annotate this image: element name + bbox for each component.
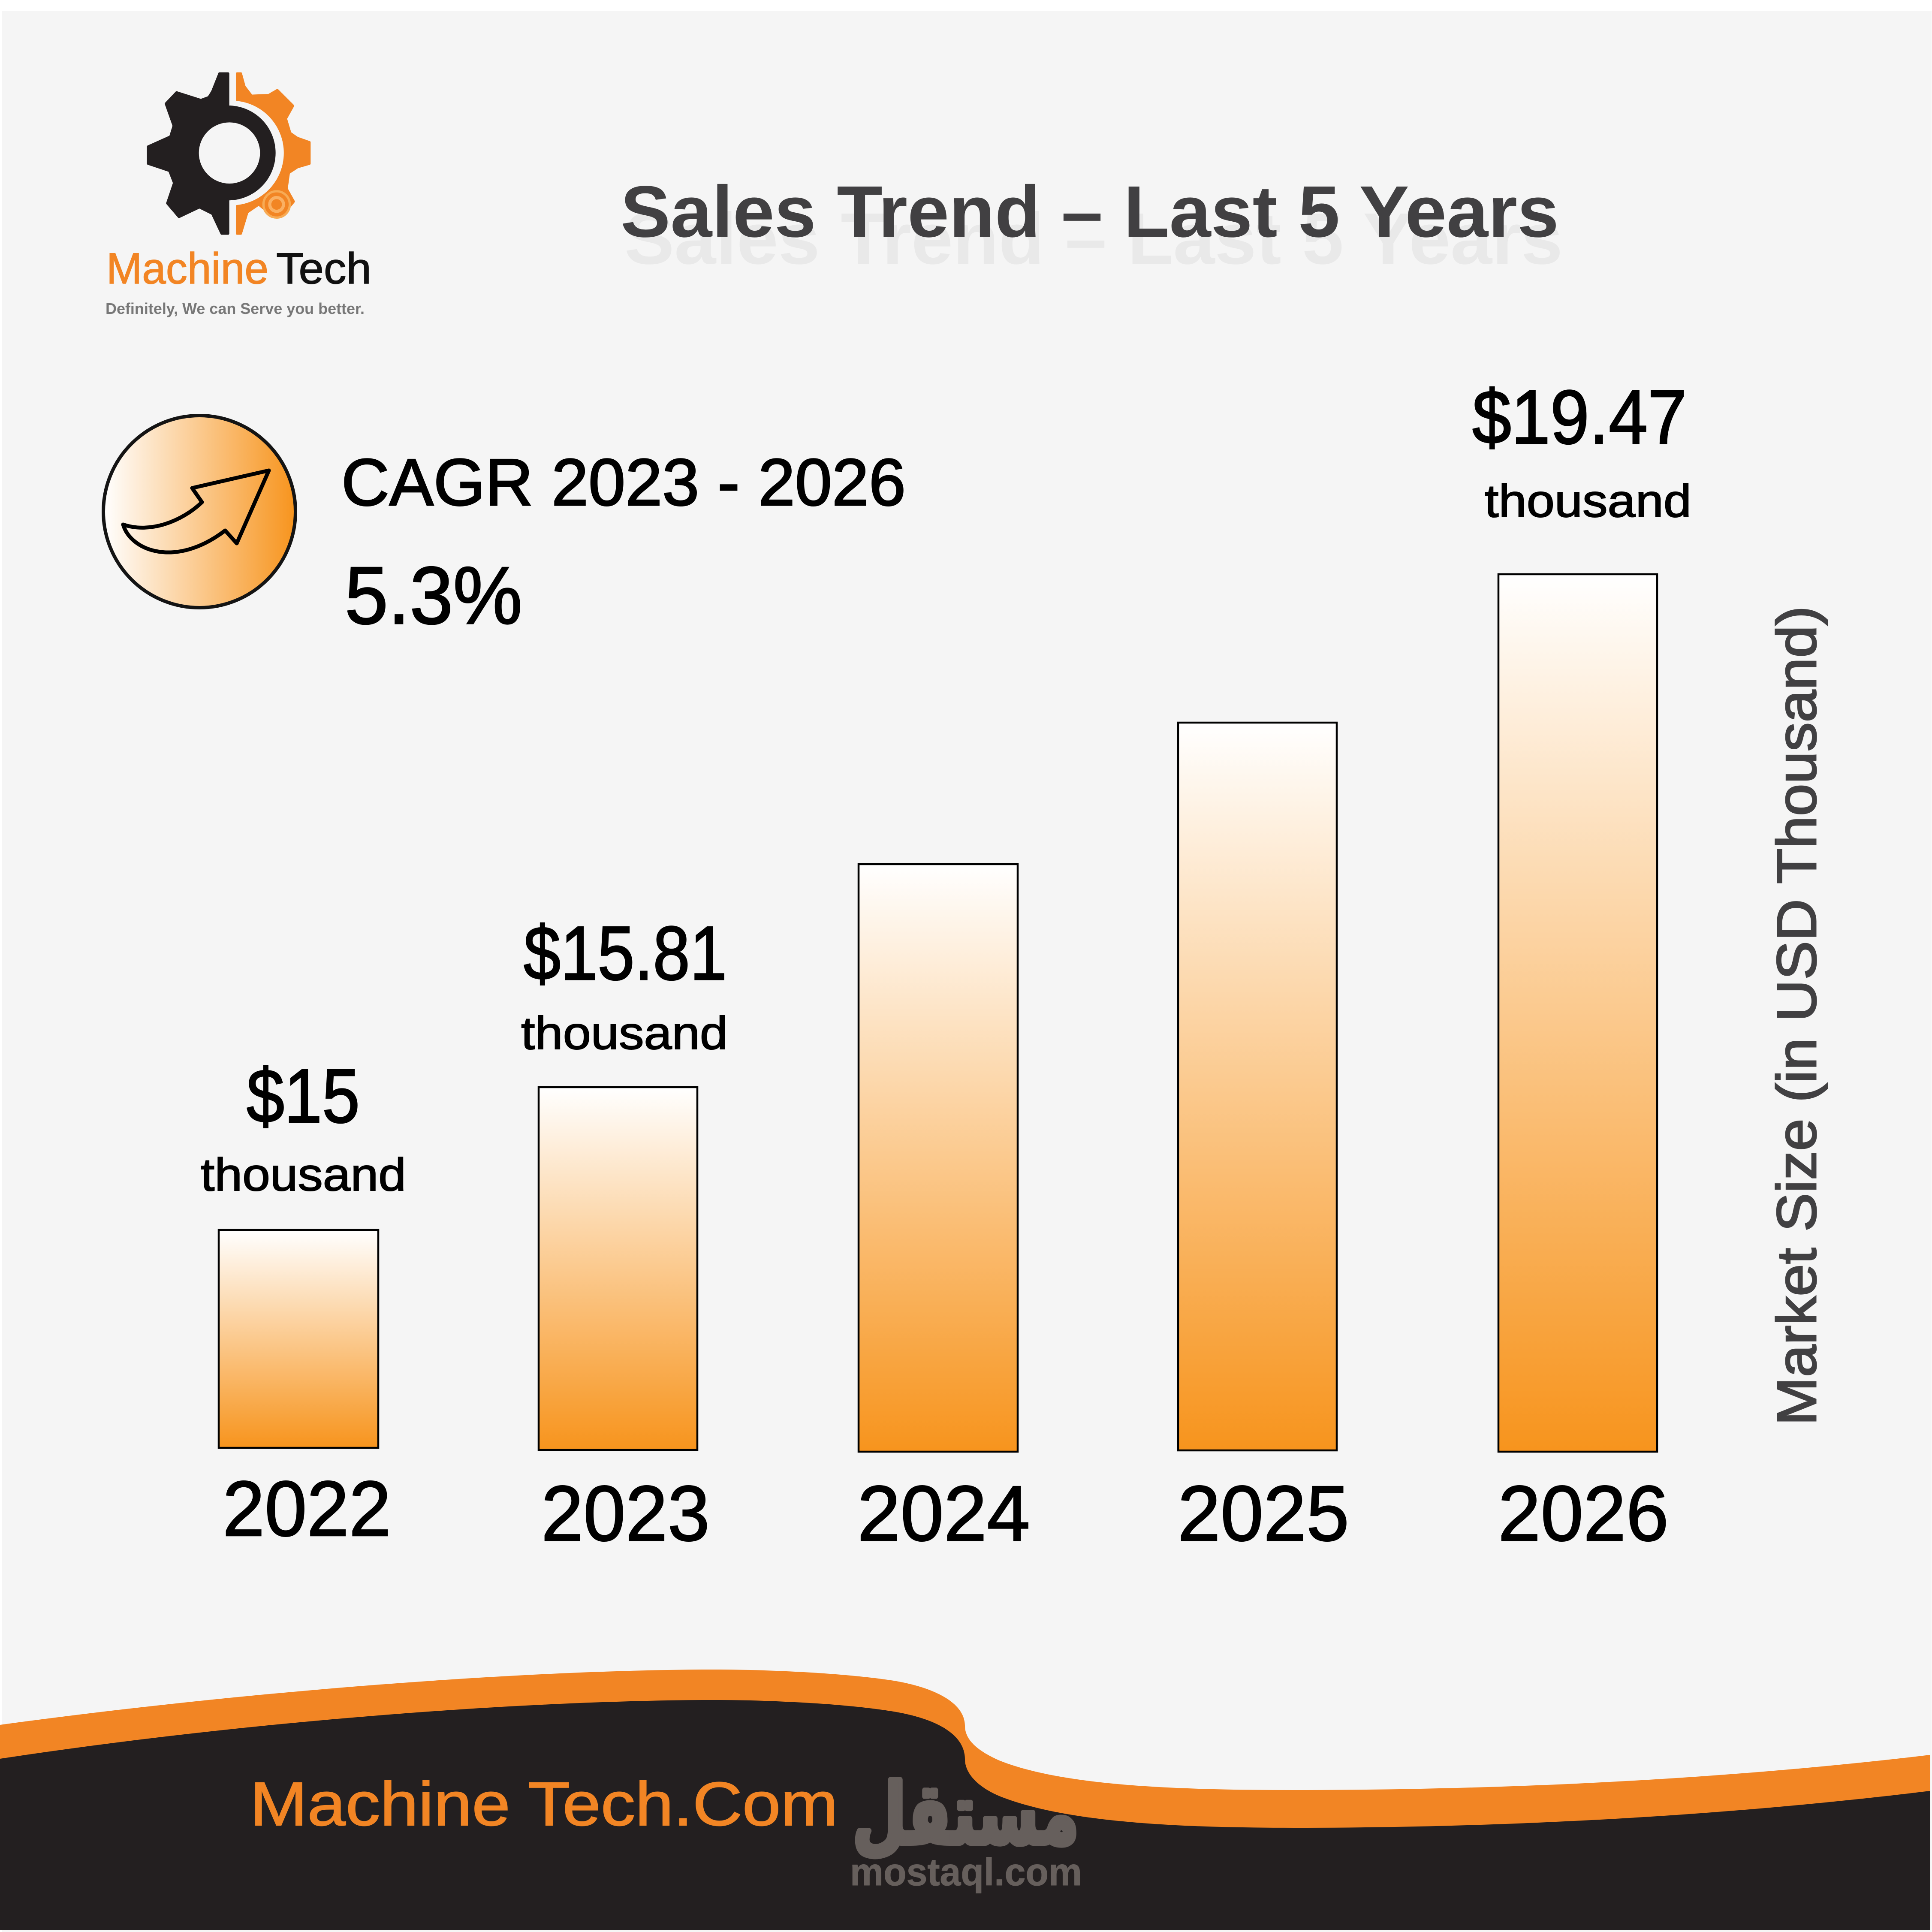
footer orange ribbon xyxy=(0,1670,1930,1844)
title with reflection xyxy=(621,171,1563,280)
bar 2025 xyxy=(1178,723,1337,1450)
unit 2023: thousand xyxy=(521,1007,728,1059)
value 2022: $15 xyxy=(247,1053,360,1139)
logo wordmark: Machine: Machine xyxy=(106,244,268,293)
year 2023: 2023 xyxy=(541,1469,710,1557)
CAGR label: CAGR 2023 - 2026 xyxy=(341,445,906,519)
logo wordmark: Tech: Tech xyxy=(276,244,371,293)
unit 2026: thousand xyxy=(1485,475,1691,527)
axis label: Market Size (in USD Thousand) xyxy=(1765,606,1828,1426)
watermark xyxy=(850,1766,1082,1894)
icon: gear xyxy=(148,73,310,234)
bar 2026 xyxy=(1498,574,1657,1452)
unit 2022: thousand xyxy=(201,1148,406,1200)
year 2025: 2025 xyxy=(1178,1469,1349,1557)
year 2022: 2022 xyxy=(223,1465,391,1552)
watermark arabic wordmark: مستقل xyxy=(853,1766,1079,1863)
footer dark base xyxy=(0,1700,1930,1930)
CAGR value: 5.3% xyxy=(345,550,522,641)
watermark latin wordmark: mostaql.com xyxy=(850,1851,1082,1894)
bar 2024 xyxy=(859,864,1018,1452)
logo tagline: Definitely, We can Serve you better. xyxy=(105,300,365,317)
footer wave xyxy=(0,1670,1930,1930)
value 2026: $19.47 xyxy=(1472,374,1687,460)
footer website: Machine Tech.Com xyxy=(250,1769,838,1839)
logo: Machine Tech xyxy=(105,73,371,317)
title reflection: Sales Trend – Last 5 Years xyxy=(624,198,1563,280)
title: Sales Trend – Last 5 Years xyxy=(621,171,1559,253)
bar 2023 xyxy=(539,1087,697,1450)
bar 2022 xyxy=(219,1230,378,1448)
year 2026: 2026 xyxy=(1498,1469,1669,1557)
value 2023: $15.81 xyxy=(524,910,727,996)
CAGR callout xyxy=(103,416,906,641)
icon: growth arrow in circle xyxy=(103,416,295,608)
bar chart xyxy=(201,374,1828,1557)
year 2024: 2024 xyxy=(857,1469,1030,1557)
